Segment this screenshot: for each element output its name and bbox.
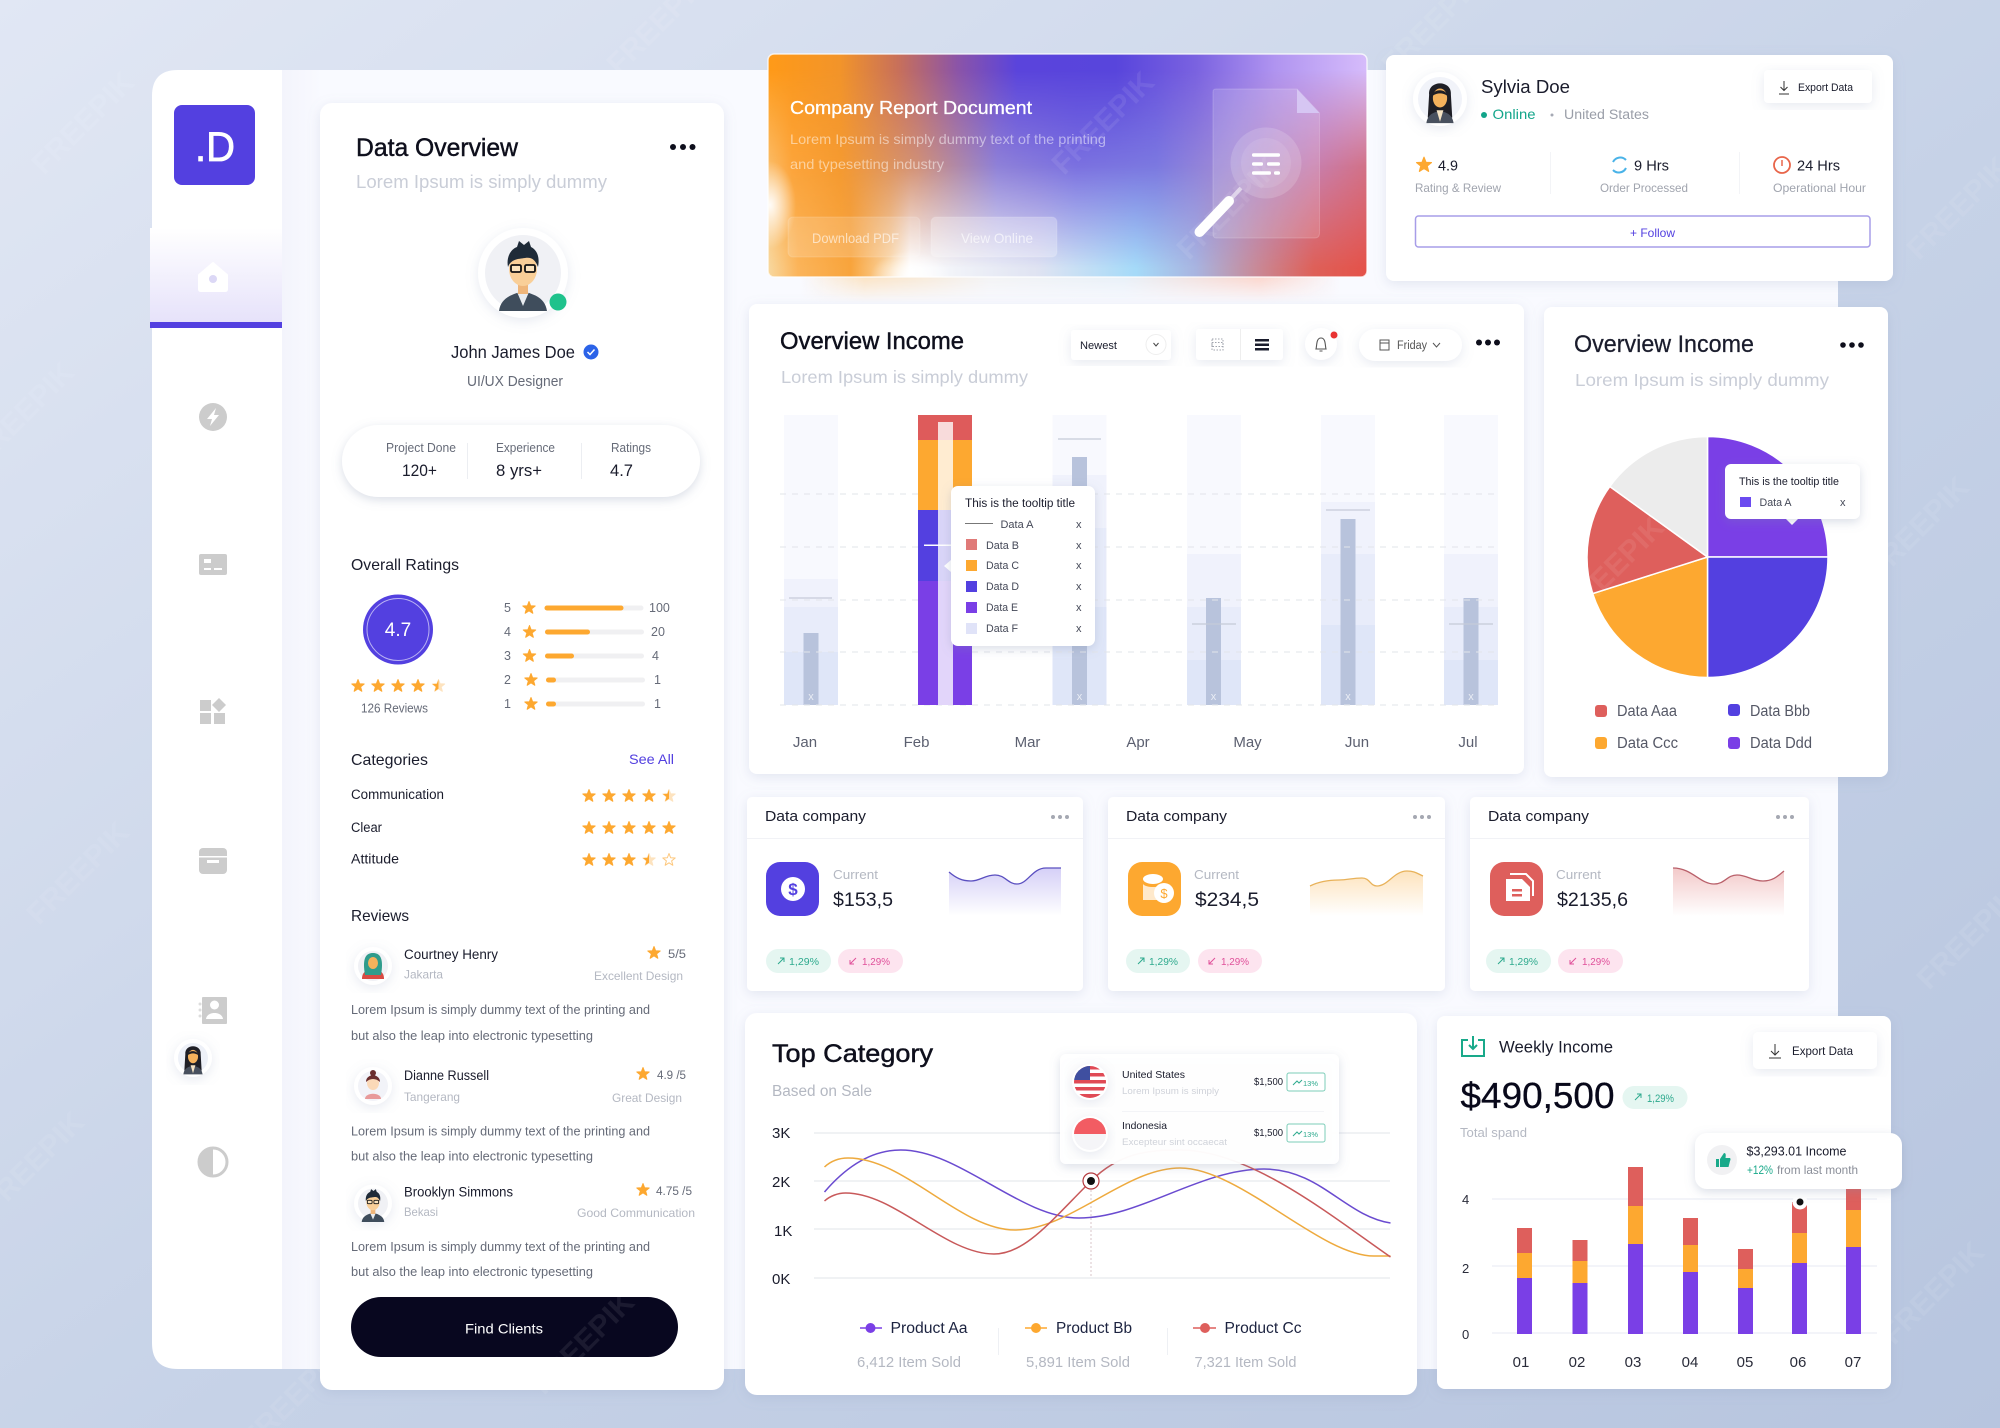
legend: product cc <box>1193 1320 1302 1371</box>
card: data company 3: Data company <box>1488 808 1590 825</box>
card: data company 3: Current <box>1556 867 1601 882</box>
banner text <box>790 131 1106 172</box>
rating bars: 1 <box>504 697 511 711</box>
badge <box>1287 1124 1325 1142</box>
tooltip: Data C <box>986 560 1019 572</box>
bar chart: x <box>1211 691 1217 703</box>
review: Courtney: but also the leap into electronic typesetting <box>351 1029 593 1043</box>
banner button: view online <box>931 217 1057 257</box>
stats pill: Experience <box>496 441 555 455</box>
stacked bar chart: 02 <box>1569 1354 1585 1371</box>
tooltip: countries <box>1060 1054 1339 1172</box>
stat: hours <box>1773 157 1866 195</box>
caption: Total spand <box>1460 1125 1527 1140</box>
review: Courtney <box>351 946 686 1043</box>
rating bars <box>504 601 670 711</box>
stat: orders: Order Processed <box>1600 181 1688 195</box>
button: export: Export Data <box>1792 1044 1853 1058</box>
badge: 13% <box>1303 1130 1318 1139</box>
stat: hours: 24 Hrs <box>1797 158 1840 174</box>
filter: friday <box>1359 329 1462 361</box>
rating badge <box>363 594 433 664</box>
stats pill: Ratings <box>611 441 651 455</box>
profile name: John James Doe <box>451 342 575 362</box>
bar chart: x <box>1077 691 1083 703</box>
banner: company report <box>767 53 1368 278</box>
stacked bar chart: 03 <box>1625 1354 1641 1371</box>
review: Courtney: Lorem Ipsum is simply dummy text of the printing and <box>351 1003 650 1017</box>
month labels: Feb <box>904 734 929 751</box>
pie chart <box>1587 436 1828 678</box>
category: clear <box>351 820 675 835</box>
bar chart: x <box>1468 691 1474 703</box>
icon: contrast toggle <box>199 1148 227 1176</box>
button: follow <box>1416 216 1870 247</box>
tooltip: Data A <box>1760 497 1792 509</box>
marker <box>1083 1173 1099 1189</box>
tooltip: x <box>1076 519 1082 531</box>
trend pills: 1,29% <box>1509 956 1538 968</box>
tooltip: countries: $1,500 <box>1254 1127 1283 1139</box>
card: data company 2: Current <box>1194 867 1239 882</box>
nav: home active <box>150 228 282 328</box>
stacked bar chart: 4 <box>1462 1192 1469 1207</box>
bar chart: x <box>1345 691 1351 703</box>
stat: orders: 9 Hrs <box>1634 158 1669 174</box>
category: communication: Communication <box>351 787 444 802</box>
icon: bell <box>1305 328 1338 360</box>
review: Brooklyn <box>351 1184 695 1279</box>
icon: dollar <box>766 862 819 916</box>
button: find clients <box>351 1297 678 1357</box>
banner button: view online: View Online <box>961 230 1033 246</box>
icon: verified <box>584 344 598 360</box>
banner glow <box>810 277 1326 299</box>
watermarks: FREEPIK <box>1171 150 1286 266</box>
icon: widgets <box>200 698 226 724</box>
avatar: Sylvia <box>1413 72 1467 126</box>
logo <box>174 105 255 185</box>
watermarks: FREEPIK <box>21 815 136 931</box>
legend: product aa: 6,412 Item Sold <box>857 1354 961 1371</box>
subtitle: Lorem Ipsum is simply dummy <box>1575 370 1829 390</box>
avatar: John <box>478 228 568 318</box>
icon: coins <box>1128 862 1181 916</box>
month labels: Mar <box>1015 734 1040 751</box>
stat: orders <box>1600 158 1688 195</box>
icon: thumbs up <box>1707 1145 1737 1175</box>
legend <box>1595 703 1812 752</box>
rating bars: 5 <box>504 601 511 615</box>
rating stars <box>352 680 445 691</box>
tooltip: x <box>1076 560 1082 572</box>
status: Online <box>1492 106 1536 122</box>
role: UI/UX Designer <box>467 374 563 390</box>
stats pill: 4.7 <box>610 461 633 480</box>
card: data company 3: $2135,6 <box>1557 890 1628 911</box>
categories heading: Categories <box>351 752 428 769</box>
review: Brooklyn: Lorem Ipsum is simply dummy text of the printing and <box>351 1240 650 1254</box>
category: clear: Clear <box>351 820 382 835</box>
panel: overview income bars <box>749 304 1524 774</box>
legend: product cc: Product Cc <box>1224 1320 1302 1337</box>
tooltip: countries: Excepteur sint occaecat <box>1122 1137 1227 1148</box>
stat: rating <box>1415 157 1501 195</box>
review: Dianne: Great Design <box>612 1091 682 1105</box>
rating bars: 1 <box>654 697 661 711</box>
rating bars: 20 <box>651 625 665 639</box>
icon: income tray <box>1462 1036 1484 1056</box>
legend: product aa: Product Aa <box>890 1320 968 1337</box>
stat: hours: Operational Hour <box>1773 181 1866 195</box>
card: data company 1: $153,5 <box>833 890 893 911</box>
review: Dianne: Tangerang <box>404 1090 460 1104</box>
tooltip: x <box>1840 497 1846 509</box>
card: data company 3 <box>1470 797 1809 991</box>
review: Dianne <box>351 1067 686 1164</box>
heading: Top Category <box>772 1040 934 1068</box>
category: communication <box>351 787 675 802</box>
rating bars: 3 <box>504 649 511 663</box>
tooltip: Data E <box>986 602 1018 614</box>
panel: top category <box>745 1013 1417 1395</box>
icon: coins: $ <box>1160 886 1168 901</box>
review: Courtney: Courtney Henry <box>404 947 498 962</box>
review: Dianne: Lorem Ipsum is simply dummy text of the printing and <box>351 1124 650 1138</box>
heading: Weekly Income <box>1499 1038 1613 1056</box>
tooltip: countries: Indonesia <box>1122 1120 1167 1132</box>
legend: product cc: 7,321 Item Sold <box>1194 1354 1296 1371</box>
month labels <box>793 734 1478 751</box>
see all link: See All <box>629 751 674 767</box>
tooltip: Data A <box>1000 519 1034 531</box>
card: data company 1: Current <box>833 867 878 882</box>
rating bars: 4 <box>652 649 659 663</box>
stacked bar chart: 01 <box>1513 1354 1529 1371</box>
menu dots <box>670 144 696 150</box>
button: export: Export Data <box>1798 82 1854 94</box>
trend pills: 1,29% <box>1149 956 1178 968</box>
button: export <box>1753 1032 1877 1069</box>
review: Brooklyn: Brooklyn Simmons <box>404 1184 513 1200</box>
legend: product bb: 5,891 Item Sold <box>1026 1354 1130 1371</box>
stacked bar chart: 0 <box>1462 1327 1469 1342</box>
bar chart: x <box>808 691 814 703</box>
sparkline <box>1673 868 1784 916</box>
tooltip <box>944 486 1095 646</box>
category: attitude <box>351 852 675 866</box>
tooltip: Data F <box>986 623 1018 635</box>
legend: product bb <box>1025 1320 1132 1371</box>
legend: Data Aaa <box>1617 703 1677 720</box>
tooltip: x <box>1076 623 1082 635</box>
line chart: 0K <box>772 1271 790 1288</box>
category: attitude: Attitude <box>351 852 399 866</box>
tooltip: Data D <box>986 581 1019 593</box>
banner text: Lorem Ipsum is simply dummy text of the printing <box>790 131 1106 147</box>
tooltip: income <box>1695 1133 1902 1189</box>
button: find clients: Find Clients <box>465 1320 543 1336</box>
stats pill <box>342 425 700 497</box>
trend pill: 1,29% <box>1647 1093 1674 1105</box>
icon: id card <box>199 554 227 575</box>
watermarks: FREEPIK <box>1876 1235 1991 1351</box>
rating bars: 1 <box>654 673 661 687</box>
flag: Indonesia <box>1072 1116 1108 1152</box>
badge: 13% <box>1303 1079 1318 1088</box>
review: Dianne: 4.9 /5 <box>657 1070 686 1082</box>
stacked bar chart: 07 <box>1845 1354 1861 1371</box>
sparkline <box>949 868 1061 916</box>
flag: USA <box>1072 1064 1108 1100</box>
icon: dollar: $ <box>788 880 798 899</box>
tooltip: This is the tooltip title <box>1739 476 1839 488</box>
banner text: and typesetting industry <box>790 156 944 172</box>
legend: Data Ccc <box>1617 735 1678 752</box>
status: United States <box>1564 107 1649 122</box>
toggle: grid and list <box>1196 329 1283 360</box>
tooltip <box>1725 464 1860 525</box>
watermarks: FREEPIK <box>26 65 141 181</box>
rating bars: 4 <box>504 625 511 639</box>
button: export <box>1764 70 1872 103</box>
card: data company 2 <box>1108 797 1445 991</box>
tooltip: x <box>1076 602 1082 614</box>
bar chart <box>780 415 1498 751</box>
avatar: sidebar user <box>174 1039 212 1077</box>
icon: documents <box>1490 862 1543 916</box>
rating badge: 4.7 <box>385 620 411 641</box>
tooltip: countries: Lorem Ipsum is simply <box>1122 1086 1219 1097</box>
stats pill: Project Done <box>386 441 456 455</box>
watermarks: FREEPIK <box>1861 470 1976 586</box>
card: data company 1 <box>747 797 1083 991</box>
review: Courtney: Excellent Design <box>594 969 683 983</box>
legend: product bb: Product Bb <box>1056 1320 1132 1337</box>
sparkline <box>1310 871 1423 916</box>
status <box>1481 106 1649 122</box>
reviews heading: Reviews <box>351 908 409 925</box>
tooltip: income: from last month <box>1777 1163 1858 1177</box>
trend pills: 1,29% <box>789 956 819 968</box>
line chart: 3K <box>772 1125 790 1142</box>
card: data company 2: $234,5 <box>1195 890 1259 911</box>
month labels: Jul <box>1458 734 1478 751</box>
review: Brooklyn: Good Communication <box>577 1206 695 1220</box>
button: follow: + Follow <box>1630 226 1675 240</box>
logo: .D <box>195 123 235 170</box>
menu dots <box>1840 342 1864 348</box>
review: Brooklyn: Bekasi <box>404 1205 438 1219</box>
review: Courtney: 5/5 <box>668 949 686 961</box>
trend pills: 1,29% <box>1221 956 1249 968</box>
month labels: Jan <box>793 734 817 751</box>
badge <box>1287 1073 1325 1091</box>
review: Brooklyn: but also the leap into electronic typesetting <box>351 1265 593 1279</box>
profile name: Sylvia Doe <box>1481 77 1570 97</box>
icon: document magnifier <box>1200 89 1320 238</box>
card: data company 1: Data company <box>765 808 867 825</box>
review: Courtney: Jakarta <box>404 968 443 982</box>
stats pill: 120+ <box>402 461 437 480</box>
main canvas <box>282 70 1838 1369</box>
panel: overview income pie <box>1544 307 1888 777</box>
month labels: Jun <box>1345 734 1369 751</box>
filter: newest <box>1071 330 1171 360</box>
stacked bar chart: 04 <box>1682 1354 1698 1371</box>
stats pill: 8 yrs+ <box>496 461 542 480</box>
tooltip: Data B <box>986 540 1019 552</box>
banner button: download: Download PDF <box>812 230 899 246</box>
icon: contact book <box>198 997 227 1024</box>
total value: $490,500 <box>1460 1075 1614 1116</box>
rating bars: 2 <box>504 673 511 687</box>
stat: rating: Rating & Review <box>1415 181 1501 195</box>
review: Brooklyn: 4.75 /5 <box>656 1186 692 1198</box>
panel: weekly income <box>1437 1016 1902 1389</box>
card: data company 2: Data company <box>1126 808 1228 825</box>
banner title: Company Report Document <box>790 98 1032 118</box>
watermarks: FREEPIK <box>526 1285 641 1401</box>
tooltip: This is the tooltip title <box>965 498 1075 510</box>
tooltip: countries: United States <box>1122 1069 1185 1081</box>
sidebar <box>150 70 322 1369</box>
tooltip: countries: $1,500 <box>1254 1076 1283 1088</box>
marker <box>1792 1194 1808 1210</box>
subtitle: Based on Sale <box>772 1083 872 1100</box>
watermarks: FREEPIK <box>1556 510 1671 626</box>
review: Dianne: Dianne Russell <box>404 1068 489 1083</box>
highlighted bar: Feb <box>918 415 972 705</box>
month labels: May <box>1233 734 1262 751</box>
legend: product aa <box>857 1320 968 1371</box>
subtitle: Lorem Ipsum is simply dummy <box>356 172 607 192</box>
legend: Data Bbb <box>1750 703 1810 720</box>
line chart: 2K <box>772 1174 790 1191</box>
tooltip: income: +12% <box>1747 1163 1773 1177</box>
trend pills: 1,29% <box>1582 956 1610 968</box>
month labels: Apr <box>1126 734 1150 751</box>
trend pills <box>1486 949 1623 973</box>
line chart: 1K <box>774 1223 792 1240</box>
heading: Overview Income <box>1574 331 1754 358</box>
trend pill <box>1622 1086 1688 1109</box>
trend pills <box>766 949 903 973</box>
trend pills <box>1126 949 1262 973</box>
icon: inbox <box>199 848 227 874</box>
menu dots <box>1476 340 1500 346</box>
tooltip: x <box>1076 581 1082 593</box>
stacked bar chart: 06 <box>1790 1354 1806 1371</box>
rating bars: 100 <box>649 601 670 615</box>
banner button: download <box>788 217 920 257</box>
legend: Data Ddd <box>1750 735 1812 752</box>
trend pills: 1,29% <box>862 956 890 968</box>
panel: data overview <box>320 103 724 1390</box>
subtitle: Lorem Ipsum is simply dummy <box>781 367 1028 387</box>
stacked bar chart: 2 <box>1462 1261 1469 1276</box>
tooltip: x <box>1076 540 1082 552</box>
panel: profile <box>1386 55 1893 281</box>
filter: newest: Newest <box>1080 340 1117 352</box>
tooltip: income: $3,293.01 Income <box>1746 1144 1847 1158</box>
review: Dianne: but also the leap into electronic typesetting <box>351 1150 593 1164</box>
overall ratings heading: Overall Ratings <box>351 557 459 574</box>
heading: Data Overview <box>356 134 519 162</box>
line chart <box>772 1125 1390 1288</box>
filter: friday: Friday <box>1397 340 1427 352</box>
heading: Overview Income <box>780 328 964 355</box>
stacked bar chart <box>1462 1167 1877 1371</box>
stat: rating: 4.9 <box>1438 158 1458 174</box>
icon: bolt <box>199 403 227 431</box>
review count: 126 Reviews <box>361 702 428 716</box>
watermarks: FREEPIK <box>1046 65 1161 181</box>
stacked bar chart: 05 <box>1737 1354 1753 1371</box>
